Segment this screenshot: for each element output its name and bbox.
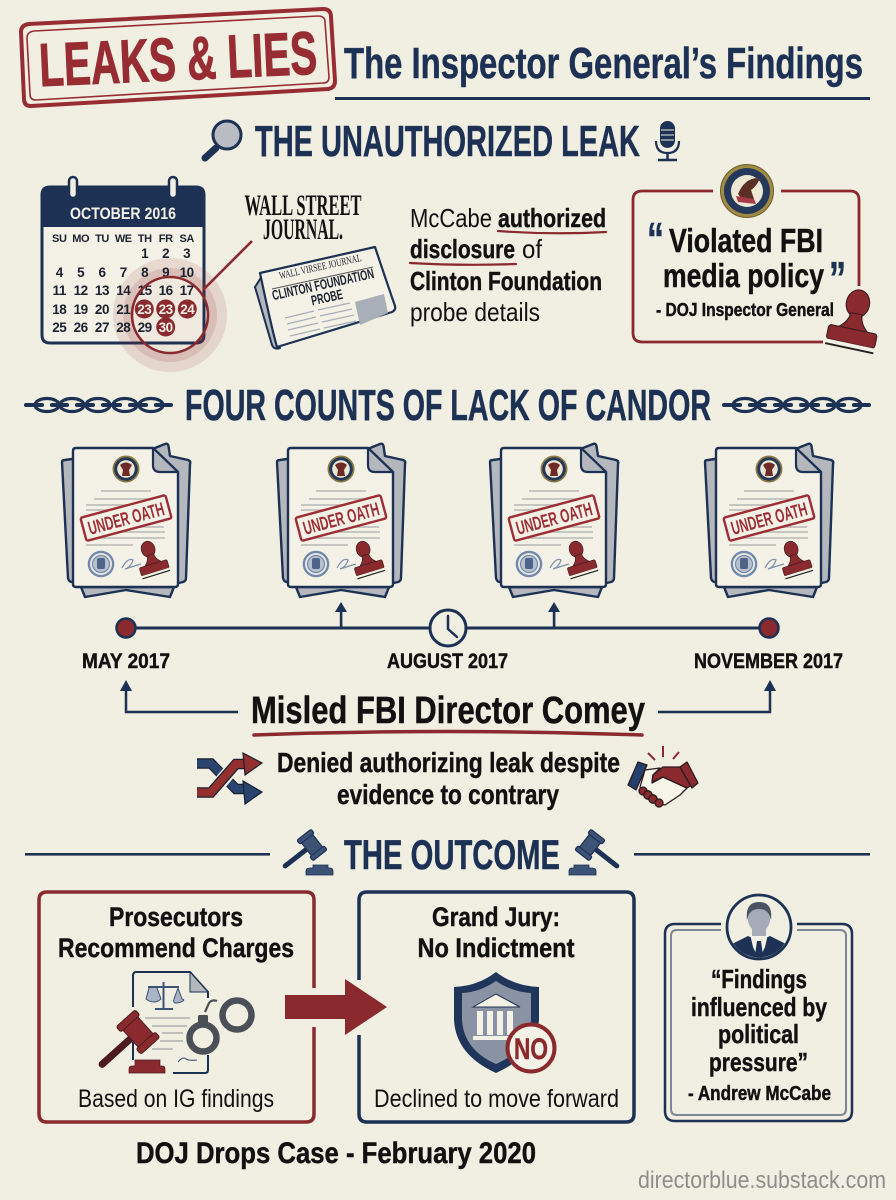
timeline date labels: NOVEMBER 2017: [694, 650, 843, 673]
wall street journal masthead: WALL STREET: [244, 189, 362, 222]
date numbers: 5: [77, 265, 85, 280]
chain: right: [724, 398, 869, 412]
newspaper text: PROBE: [310, 286, 344, 308]
title rule: [335, 97, 870, 100]
date numbers: 21: [116, 302, 131, 317]
weekday row: SA: [179, 233, 194, 245]
panel: prosecutors recommend charges: [39, 892, 314, 1122]
date numbers: 16: [159, 283, 174, 298]
end dot: [760, 618, 778, 638]
weekday row: FR: [159, 233, 173, 245]
callout: violated fbi media policy: [633, 164, 886, 354]
document 4: under oath: UNDER OATH: [729, 499, 810, 540]
panel heading: No Indictment: [418, 933, 575, 963]
icon: person portrait: [727, 895, 791, 960]
quote text: political: [718, 1019, 799, 1049]
date numbers: 20: [95, 302, 109, 317]
date numbers: 10: [180, 265, 194, 280]
heading: misled fbi director comey: Misled FBI Director Comey: [251, 690, 645, 732]
date numbers: [52, 246, 195, 335]
text block: mccabe disclosure: probe details: [410, 297, 540, 327]
date numbers: 13: [95, 283, 110, 298]
date numbers: 29: [138, 320, 152, 335]
date numbers: 8: [141, 265, 149, 280]
date numbers: 28: [116, 320, 131, 335]
panel caption: Based on IG findings: [78, 1085, 274, 1113]
date numbers: 18: [52, 302, 67, 317]
arrow: prosecutors to grand jury: [285, 979, 387, 1035]
section heading: the unauthorized leak: THE UNAUTHORIZED LEAK: [255, 117, 640, 166]
calendar month: OCTOBER 2016: [70, 204, 176, 223]
icon: handshake: [628, 746, 698, 807]
quote text: “Findings: [711, 964, 807, 994]
calendar: october 2016: [42, 177, 252, 362]
panel: grand jury no indictment: [359, 892, 634, 1122]
date numbers: 4: [56, 265, 64, 280]
document 2: under oath: UNDER OATH: [301, 499, 382, 540]
timeline date labels: [82, 650, 843, 673]
icon: crossed arrows: [197, 753, 262, 804]
quotation marks: “: [647, 213, 664, 265]
icon: gavel right: [569, 829, 625, 876]
start dot: [116, 618, 136, 638]
red underline: [254, 732, 642, 735]
icon: red gavel: [90, 1010, 165, 1078]
stamp title: Leaks & Lies: LEAKS & LIES: [38, 19, 318, 99]
calendar rings: [69, 177, 177, 198]
no badge: [508, 1024, 554, 1072]
timeline: [116, 602, 778, 646]
highlight ring and connector: [132, 241, 252, 353]
arrow: left bracket: [120, 680, 238, 712]
highlight halo: [122, 268, 218, 362]
date numbers: 15: [138, 283, 153, 298]
outcome rule left: [25, 853, 270, 856]
text block: mccabe disclosure: McCabe: [410, 203, 492, 233]
text block: mccabe disclosure: Clinton Foundation: [410, 266, 602, 296]
quotation marks: ”: [829, 252, 846, 304]
document 3: under oath: UNDER OATH: [514, 499, 595, 540]
document 2: under oath: [277, 444, 405, 597]
icon: microphone: [656, 121, 679, 160]
quote text: Violated FBI: [669, 222, 823, 259]
document 3: under oath: [490, 444, 618, 597]
stamp title: Leaks & Lies: [21, 9, 335, 106]
panel heading: [58, 902, 294, 963]
newspaper text: CLINTON FOUNDATION: [270, 265, 375, 303]
outcome rule right: [634, 853, 870, 856]
newspaper text: WALL VIRSEE JOURNAL: [278, 253, 363, 282]
text: denied authorizing leak: Denied authorizing leak despite: [277, 747, 620, 778]
date numbers: 11: [53, 283, 67, 298]
quote text: pressure”: [709, 1047, 808, 1077]
date numbers: 30: [159, 320, 173, 335]
date numbers: 27: [95, 320, 109, 335]
arrow: right bracket: [658, 680, 776, 712]
weekday row: [52, 233, 194, 245]
panel caption: Declined to move forward: [374, 1085, 619, 1113]
timeline arrows: [335, 602, 560, 628]
panel heading: [418, 902, 575, 963]
icon: magnifying glass: [205, 121, 241, 158]
quote text: [691, 964, 827, 1077]
date numbers: 7: [120, 265, 127, 280]
wall street journal masthead: [244, 189, 362, 246]
date numbers: 23: [137, 302, 152, 317]
quote text: [663, 222, 825, 294]
icon: legal document: [133, 972, 208, 1073]
date numbers: 24: [180, 302, 195, 317]
newspaper text: [270, 253, 375, 308]
date numbers: 3: [183, 246, 191, 261]
quote text: influenced by: [691, 992, 827, 1022]
timeline date labels: MAY 2017: [82, 650, 170, 673]
panel heading: Recommend Charges: [58, 933, 294, 963]
text block: mccabe disclosure: of: [522, 234, 543, 264]
doj seal: [720, 164, 774, 218]
icon: newspaper: [255, 247, 395, 349]
weekday row: TH: [138, 233, 152, 245]
date numbers: 25: [52, 320, 67, 335]
attribution: - DOJ Inspector General: [656, 300, 834, 320]
icon: rubber stamp: [825, 285, 886, 354]
wall street journal masthead: JOURNAL.: [263, 213, 343, 246]
panel heading: Grand Jury:: [432, 902, 560, 932]
weekday row: WE: [115, 233, 132, 245]
panel heading: Prosecutors: [109, 902, 243, 932]
date numbers: 6: [98, 265, 106, 280]
text: denied authorizing leak: [277, 747, 620, 810]
conclusion: doj drops case: DOJ Drops Case - February 2020: [136, 1137, 536, 1170]
date numbers: 14: [116, 283, 131, 298]
attribution: - Andrew McCabe: [688, 1083, 831, 1105]
panel: mccabe quote: [665, 895, 852, 1121]
date numbers: 19: [74, 302, 88, 317]
section heading: the outcome: THE OUTCOME: [344, 831, 560, 878]
date numbers: 1: [141, 246, 149, 261]
date numbers: 26: [74, 320, 89, 335]
chain: left: [26, 398, 171, 412]
date numbers: 12: [74, 283, 88, 298]
document 1: under oath: [62, 444, 190, 597]
text block: mccabe disclosure: [410, 203, 606, 327]
date numbers: 23: [159, 302, 174, 317]
quote text: media policy: [663, 257, 825, 294]
weekday row: MO: [72, 233, 90, 245]
date numbers: 2: [162, 246, 169, 261]
no badge: NO: [514, 1033, 548, 1066]
date numbers: 17: [180, 283, 194, 298]
highlighted date circles: [135, 300, 197, 336]
quotation marks: [647, 213, 846, 304]
weekday row: TU: [95, 233, 109, 245]
weekday row: SU: [52, 233, 67, 245]
timeline date labels: AUGUST 2017: [387, 650, 508, 673]
document 1: under oath: UNDER OATH: [86, 499, 167, 540]
icon: handcuffs: [190, 1000, 252, 1052]
document 4: under oath: [705, 444, 833, 597]
icon: gavel left: [277, 829, 333, 876]
text block: mccabe disclosure: disclosure: [410, 234, 515, 264]
icon: clock: [430, 610, 466, 646]
icon: shield: [454, 972, 539, 1073]
text: denied authorizing leak: evidence to contrary: [337, 779, 559, 810]
text block: mccabe disclosure: authorized: [498, 203, 606, 233]
date numbers: 9: [162, 265, 169, 280]
